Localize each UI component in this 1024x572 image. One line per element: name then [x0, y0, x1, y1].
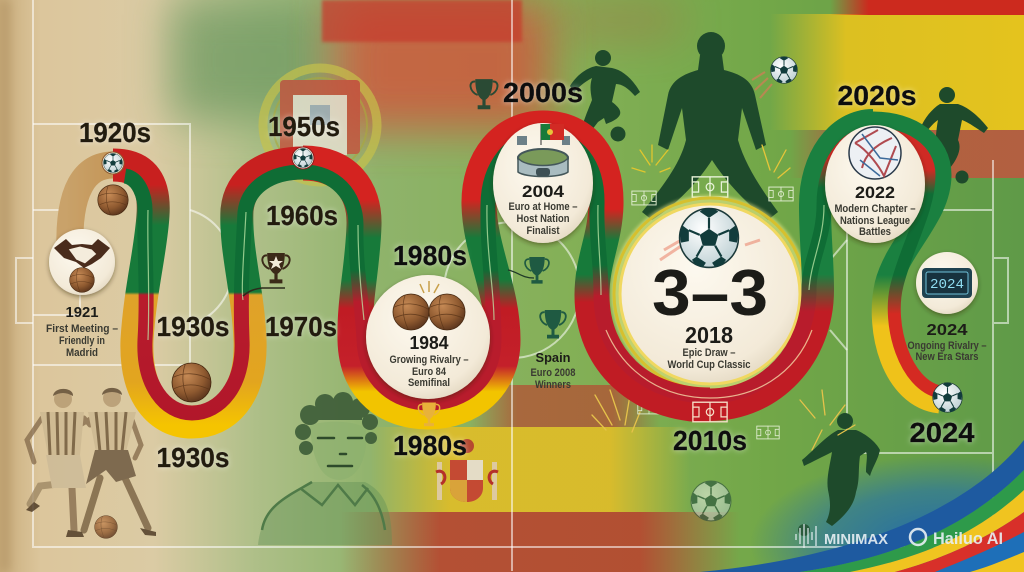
timeline ribbon	[70, 125, 940, 422]
decade labels: 1980s	[393, 240, 467, 271]
node: 2004 euro at home: Finalist	[526, 225, 560, 237]
silhouette: right player with ball	[918, 87, 988, 184]
node: 2004 euro at home	[493, 123, 593, 243]
node: 2022 modern chapter: Battles	[859, 226, 891, 238]
silhouette: upper kicking player	[570, 50, 640, 142]
2018 score text: Epic Draw –	[682, 347, 736, 359]
top-right flying ball	[752, 57, 797, 98]
node: 2024 ongoing rivalry: New Era Stars	[916, 351, 978, 363]
decade labels: 1980s	[393, 430, 467, 461]
node: 1921 first meeting	[46, 229, 118, 359]
2018 score text	[652, 209, 768, 371]
trophy: connector to 2004	[508, 257, 549, 284]
node: 2024 ongoing rivalry: Ongoing Rivalry –	[908, 340, 986, 352]
watermark	[796, 524, 1003, 548]
node: 1984 growing rivalry: Semifinal	[408, 377, 450, 389]
2018 score text: World Cup Classic	[668, 359, 750, 371]
Spain coat of arms	[436, 439, 498, 502]
Spain Euro 2008 winners: Spain	[536, 350, 571, 365]
node: 2022 modern chapter: Modern Chapter –	[834, 203, 916, 215]
icon: handshake	[54, 239, 110, 268]
trophy: 2000s	[470, 79, 498, 109]
node: 1921 first meeting: Madrid	[66, 347, 98, 359]
Spain Euro 2008 winners: Winners	[535, 379, 571, 391]
vintage footballers illustration	[26, 388, 156, 538]
silhouette: central striker	[642, 32, 778, 220]
decade labels: 2000s	[503, 77, 583, 108]
node: 1921 first meeting: First Meeting –	[46, 323, 118, 335]
2018 score text: 2018	[685, 322, 733, 348]
node: 1921 first meeting: 1921	[66, 304, 98, 321]
decade labels: 2024	[910, 417, 975, 448]
node: 2004 euro at home: 2004	[522, 182, 565, 201]
Spain Euro 2008 winners	[530, 310, 576, 391]
icon: digital scoreboard 2024: 2024	[930, 277, 964, 293]
Spain Euro 2008 winners: Euro 2008	[530, 367, 576, 379]
node: 2022 modern chapter	[825, 125, 925, 243]
node: 1984 growing rivalry	[366, 275, 490, 399]
decade labels: 1920s	[79, 117, 151, 148]
Portugal coat of arms	[263, 68, 377, 182]
node: 2024 ongoing rivalry: 2024	[926, 322, 968, 339]
icon: modern match ball	[849, 127, 901, 179]
portrait of curly-haired player	[258, 392, 392, 545]
central score circle: 2018	[614, 198, 806, 390]
icon: stadium	[517, 136, 570, 176]
fireworks and mini pitches	[592, 145, 855, 450]
decade labels: 2020s	[838, 80, 916, 111]
node: 2022 modern chapter: Nations League	[840, 215, 910, 227]
decade labels: 1930s	[156, 442, 230, 473]
watermark: MINIMAX	[824, 531, 888, 548]
trophy: gold on ribbon	[418, 402, 440, 426]
decade labels: 1950s	[268, 111, 340, 142]
node: 1921 first meeting: Friendly in	[59, 335, 105, 347]
node: 2004 euro at home: Host Nation	[516, 213, 570, 225]
faded soccer ball	[691, 481, 731, 521]
end-of-ribbon ball	[933, 383, 962, 412]
node: 2004 euro at home: Euro at Home –	[508, 201, 578, 213]
trophy: 1970s connector	[243, 253, 290, 296]
silhouette: lower running player	[798, 413, 880, 536]
node: 2022 modern chapter: 2022	[855, 183, 895, 202]
node: 1984 growing rivalry: Growing Rivalry –	[390, 354, 468, 366]
decade labels: 1970s	[265, 311, 337, 342]
decade labels: 1960s	[266, 200, 338, 231]
node: 1984 growing rivalry: Euro 84	[412, 366, 447, 378]
decade labels: 2010s	[673, 425, 747, 456]
icon: Portugal flag	[541, 124, 564, 145]
decade labels	[79, 77, 975, 473]
node: 2024 ongoing rivalry	[908, 252, 986, 363]
watermark: Hailuo AI	[933, 529, 1003, 548]
decade labels: 1930s	[156, 311, 230, 342]
bottom-right colour swooshes	[700, 440, 1024, 572]
vintage balls on first arc	[98, 147, 314, 402]
node: 1984 growing rivalry: 1984	[410, 333, 448, 353]
2018 score text: 3–3	[652, 256, 768, 329]
